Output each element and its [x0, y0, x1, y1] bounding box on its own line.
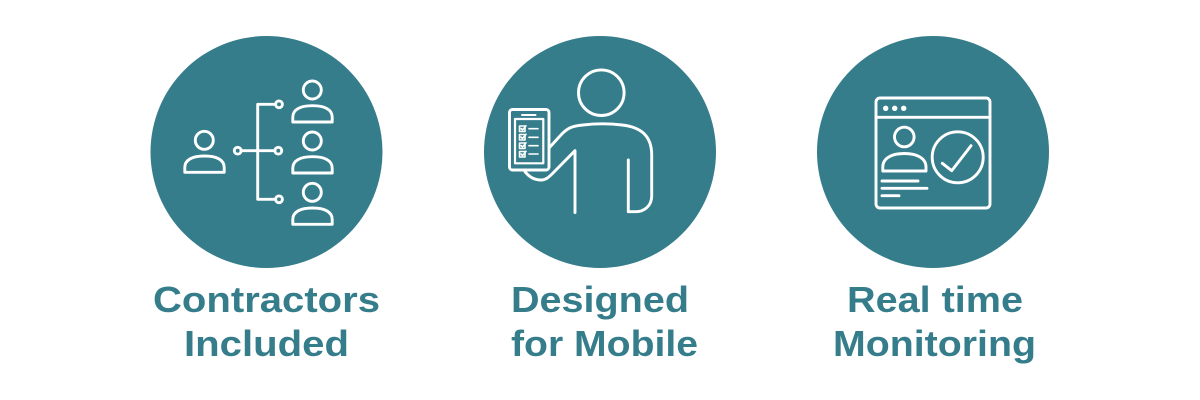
person: [883, 127, 926, 171]
label: Real time Monitoring: Real time: [847, 279, 1023, 320]
label: Real time Monitoring: Monitoring: [833, 323, 1036, 364]
label: Contractors Included: [153, 279, 380, 364]
circle background: monitoring: [817, 36, 1049, 268]
person body: [550, 124, 652, 212]
icon: main person: [185, 131, 224, 172]
browser window: [876, 98, 990, 208]
text lines: [882, 181, 927, 196]
label: Designed for Mobile: Designed: [511, 279, 689, 320]
person head: [578, 70, 624, 115]
icon: browser window with verified person: [876, 98, 990, 208]
check circle: [932, 132, 983, 183]
icon: middle contractor: [293, 132, 332, 173]
panel: contractors included: [150, 36, 382, 364]
icon: top contractor: [293, 81, 332, 122]
panel: real time monitoring: [817, 36, 1049, 364]
checklist: [520, 126, 538, 157]
circle background: mobile: [484, 36, 716, 268]
label: Real time Monitoring: [833, 279, 1036, 364]
icon: person holding tablet: [510, 70, 652, 212]
connector tree: [234, 101, 282, 203]
tablet: [510, 110, 549, 170]
person arm: [525, 151, 575, 212]
panel: designed for mobile: [484, 36, 716, 364]
label: Designed for Mobile: for Mobile: [511, 323, 698, 364]
icon: contractor hierarchy: [185, 81, 332, 224]
icon: bottom contractor: [293, 183, 332, 224]
label: Contractors Included: Included: [184, 323, 349, 364]
circle background: contractors: [150, 36, 382, 268]
label: Designed for Mobile: [511, 279, 698, 364]
label: Contractors Included: Contractors: [153, 279, 380, 320]
